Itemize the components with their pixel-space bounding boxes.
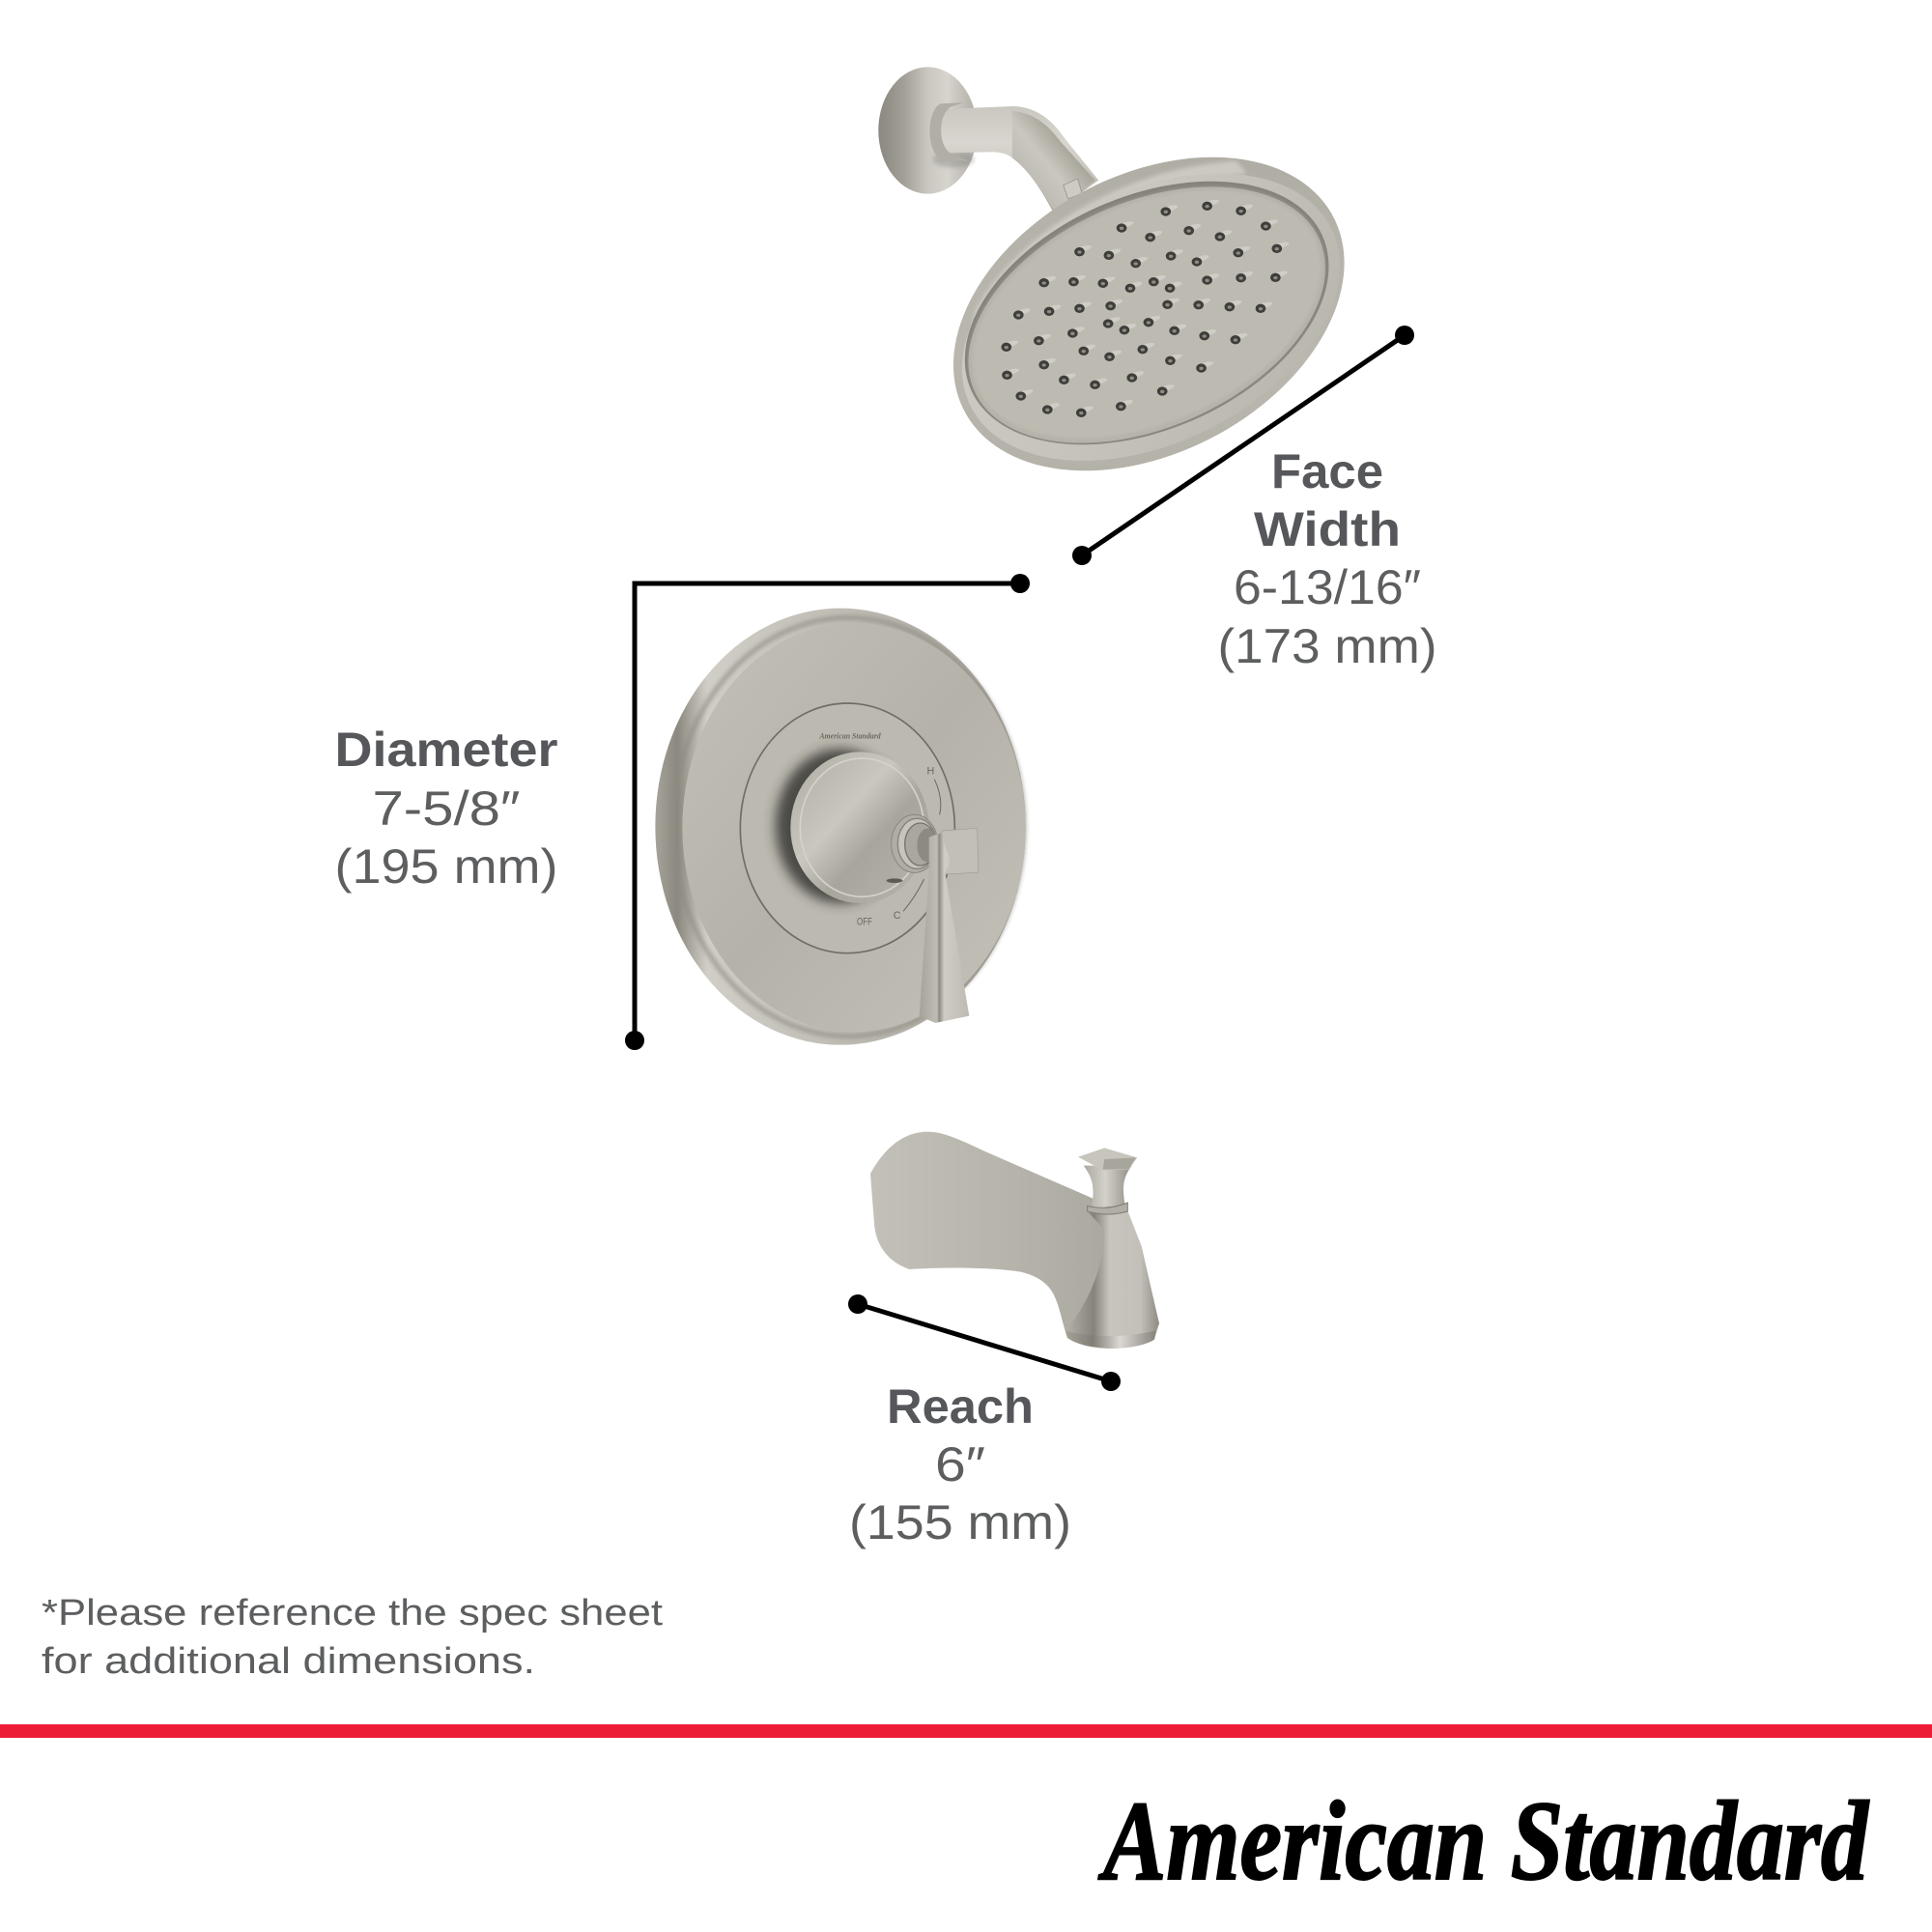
plate markings: OFF — [857, 917, 872, 928]
label: diameter: Diameter — [334, 723, 558, 777]
lever collar — [892, 814, 938, 872]
footnote: for additional dimensions. — [42, 1641, 535, 1682]
hub shadow — [776, 749, 904, 903]
red divider bar — [0, 1724, 1932, 1738]
plate markings — [818, 731, 941, 928]
label: face width: Face — [1271, 444, 1383, 498]
diverter knob cap — [1078, 1148, 1137, 1170]
ball joint ridges — [1064, 179, 1082, 199]
face groove — [918, 128, 1376, 498]
label: face width: 6-13/16″ — [1234, 560, 1421, 614]
head outer shell — [892, 93, 1406, 535]
plate markings: H — [926, 766, 934, 778]
shower arm — [936, 106, 1098, 213]
hub inner ring — [800, 758, 923, 896]
tub spout — [870, 1132, 1159, 1349]
label: face width — [1217, 444, 1437, 673]
diverter stem — [1084, 1166, 1132, 1208]
ring groove — [740, 703, 954, 953]
label: diameter — [334, 723, 558, 894]
face plate — [923, 135, 1371, 495]
label: diameter: (195 mm) — [334, 839, 558, 894]
lever blade — [920, 833, 969, 1023]
label: face width: Width — [1254, 502, 1401, 556]
label: reach — [849, 1379, 1071, 1549]
diverter cone — [1065, 1210, 1159, 1338]
label: reach: 6″ — [935, 1437, 985, 1492]
wall flange — [878, 67, 977, 194]
valve trim plate with lever handle — [655, 609, 1026, 1045]
label: diameter: 7-5/8″ — [373, 781, 520, 836]
escutcheon rim shade — [673, 617, 1024, 1037]
label: face width: (173 mm) — [1217, 619, 1437, 673]
plate markings: American Standard — [818, 731, 882, 740]
face inner shade — [924, 136, 1369, 493]
escutcheon back edge — [655, 609, 1026, 1045]
dimension line: reach — [848, 1294, 1121, 1391]
lever tab — [942, 828, 979, 874]
bottom band — [1065, 1330, 1156, 1349]
footnote: *Please reference the spec sheet — [42, 1593, 664, 1634]
front lip — [908, 115, 1394, 520]
dimension line: diameter — [625, 574, 1030, 1050]
plate markings: C — [894, 910, 901, 922]
nozzles — [1001, 198, 1290, 417]
label: reach: Reach — [887, 1379, 1034, 1434]
footnote — [42, 1593, 664, 1682]
back shell highlight — [969, 161, 1247, 357]
diverter collar — [1088, 1203, 1127, 1214]
escutcheon front face — [682, 623, 1026, 1032]
shower head with arm — [878, 67, 1406, 535]
dimension line: face width — [1072, 326, 1414, 565]
arm collar — [929, 102, 969, 161]
spout body — [870, 1132, 1159, 1349]
flange shadow — [933, 152, 975, 167]
hub — [790, 752, 929, 903]
label: reach: (155 mm) — [849, 1495, 1071, 1549]
